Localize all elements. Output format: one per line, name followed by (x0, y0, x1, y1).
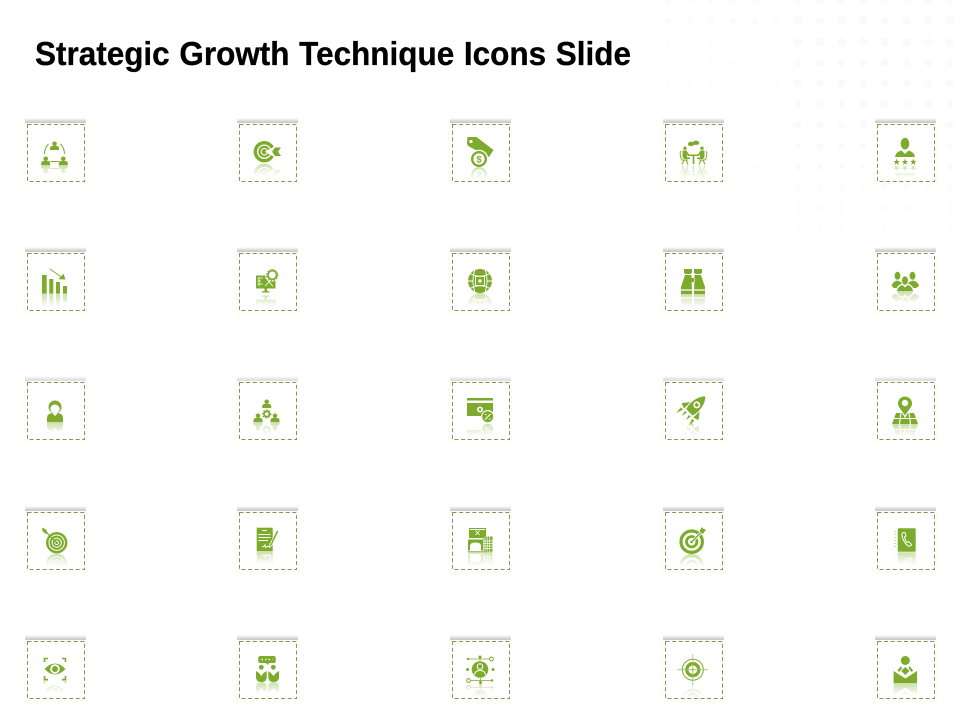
tile: phone book (874, 506, 937, 576)
icon: eye focus (44, 658, 66, 680)
icon: store and calculator (468, 528, 492, 552)
tile: reader with open envelope (874, 635, 937, 710)
tile: target with dart (236, 118, 299, 185)
tile: declining bar chart (24, 247, 87, 319)
tile: team with gear (236, 376, 299, 444)
icon: binoculars (680, 269, 706, 294)
tile: eye focus (24, 635, 87, 702)
tile: map pin (874, 376, 937, 452)
icon: rocket (674, 388, 714, 428)
tile: person network (448, 636, 513, 702)
tile: price tag and coin (448, 118, 513, 185)
tile: target with dart top right (662, 506, 725, 581)
icon: document and pen (257, 528, 279, 551)
tile: rocket (661, 377, 726, 443)
icon: map pin (892, 396, 918, 424)
tile: two people talking (236, 635, 299, 708)
icon: crosshair (677, 654, 708, 685)
tile: crosshair (661, 636, 726, 702)
tile: store and calculator (449, 506, 512, 577)
tile: document and pen (236, 506, 299, 574)
background dot pattern (538, 0, 950, 250)
icon: two people talking (256, 656, 279, 682)
icon: monitor with gear (256, 268, 279, 292)
icon: target with dart (254, 141, 281, 162)
icon: team of three (892, 272, 919, 292)
tile: card with percent (449, 376, 512, 448)
icon: price tag and coin: $ (476, 154, 482, 165)
tile: monitor with gear (236, 247, 299, 320)
tile: team network (24, 118, 87, 188)
tile: binoculars (662, 247, 725, 319)
icon: globe (468, 269, 492, 293)
icon: person network (466, 656, 494, 684)
icon: team with gear (254, 400, 280, 422)
icon: target with dart top right (681, 527, 706, 552)
icon: reader with open envelope (894, 656, 917, 683)
icon: rated employee (894, 138, 916, 165)
icon: bullseye with arrow (42, 528, 67, 553)
icon: team network (41, 142, 68, 165)
icon: support agent (47, 400, 63, 422)
tile: support agent (24, 376, 87, 444)
tile: team of three (874, 247, 937, 313)
icon: meeting at table (680, 141, 707, 164)
title: Strategic Growth Technique Icons Slide (35, 36, 631, 73)
icon: card with percent (467, 398, 494, 423)
tile: bullseye with arrow (24, 506, 87, 580)
tile: meeting at table (662, 118, 725, 189)
icon: declining bar chart (42, 269, 67, 294)
tile: globe (449, 247, 512, 317)
icon: phone book (895, 528, 916, 552)
tile: rated employee (874, 118, 937, 192)
